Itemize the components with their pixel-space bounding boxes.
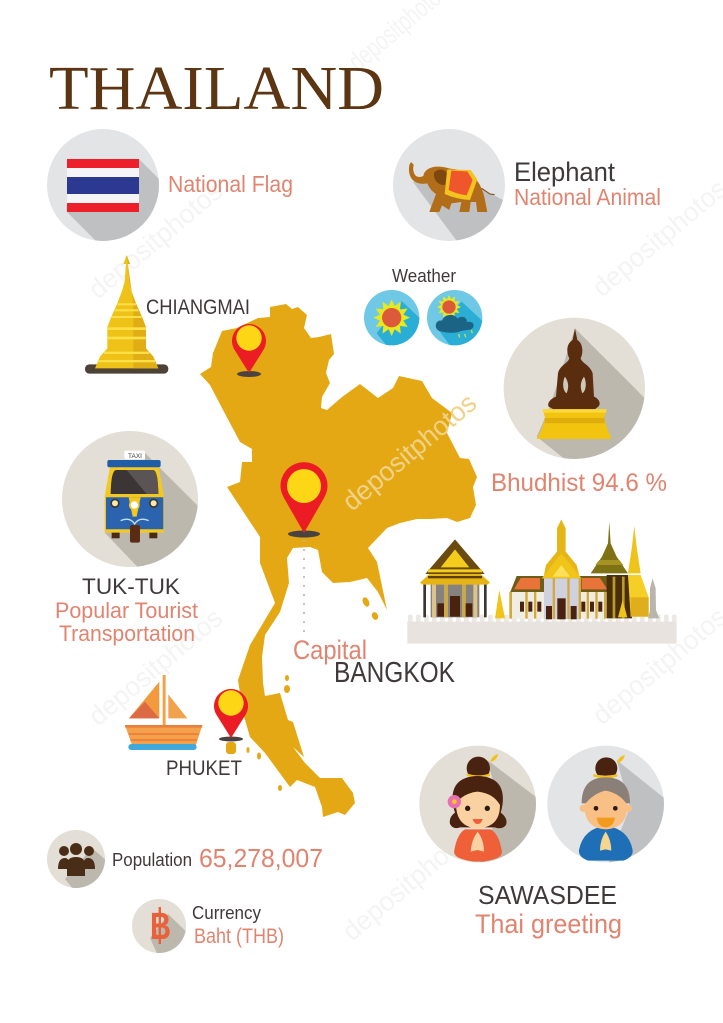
golden chedi <box>628 526 649 617</box>
tuk-tuk description <box>55 598 198 646</box>
islands <box>226 596 379 791</box>
pin: Bangkok <box>280 462 328 538</box>
people badges <box>419 746 667 863</box>
tuk-tuk description: Popular Tourist <box>55 598 198 623</box>
pin: Phuket <box>214 689 248 742</box>
palace wall <box>408 615 677 623</box>
elephant badge <box>393 129 510 244</box>
currency badge <box>132 899 186 953</box>
map of Thailand <box>200 304 477 817</box>
weather heading: Weather <box>392 266 456 286</box>
Sawasdee heading: SAWASDEE <box>478 880 617 910</box>
label: Buddhist share: Bhudhist 94.6 % <box>491 469 667 497</box>
capital dotted line <box>303 540 305 633</box>
Thai greeting subtitle: Thai greeting <box>475 909 622 939</box>
population label: Population <box>112 850 192 870</box>
icon: baht symbol: B <box>150 906 171 948</box>
Bangkok label: BANGKOK <box>334 657 456 689</box>
currency label: Currency <box>192 903 261 923</box>
watermark: depositphotos <box>83 603 228 732</box>
weather icons <box>364 290 483 350</box>
tuk-tuk heading: TUK-TUK <box>82 574 180 599</box>
Buddha badge <box>504 318 650 463</box>
icon: sun <box>364 290 420 346</box>
icon: people <box>58 843 95 876</box>
title: THAILAND <box>49 55 384 123</box>
icon: Buddha statue <box>537 328 612 439</box>
pin: Chiangmai <box>232 324 266 377</box>
capital label: Capital <box>293 635 367 665</box>
icon: elephant <box>409 162 495 212</box>
watermark: depositphotos <box>83 176 228 305</box>
boy <box>547 746 667 863</box>
white prang <box>648 578 659 618</box>
girl <box>419 746 540 863</box>
central palace <box>509 519 613 619</box>
icon: sailing boat <box>125 675 202 750</box>
tuk-tuk description: Transportation <box>59 621 195 646</box>
tuk-tuk badge <box>62 431 198 567</box>
elephant subtitle: National Animal <box>514 184 661 210</box>
small spire <box>495 590 505 618</box>
national flag badge <box>47 129 159 241</box>
icon: tuk-tuk <box>105 451 164 543</box>
label: Phuket: PHUKET <box>166 757 242 780</box>
elephant heading: Elephant <box>514 157 615 187</box>
population value: 65,278,007 <box>199 843 323 873</box>
icon: Grand Palace temples <box>407 519 677 644</box>
icon: Chiangmai golden stupa <box>85 255 168 374</box>
population badge <box>47 830 105 888</box>
icon: rain cloud <box>427 290 483 350</box>
dark pagoda <box>591 522 632 618</box>
watermark: depositphotos <box>337 818 482 947</box>
icon: flag <box>67 159 139 212</box>
map watermark: depositphotos <box>337 388 482 517</box>
left temple <box>420 539 490 617</box>
national flag label: National Flag <box>168 171 293 197</box>
wall body <box>407 622 677 644</box>
taxi sign text: TAXI <box>128 453 142 460</box>
label: Chiangmai: CHIANGMAI <box>146 296 250 319</box>
currency value: Baht (THB) <box>194 925 284 948</box>
